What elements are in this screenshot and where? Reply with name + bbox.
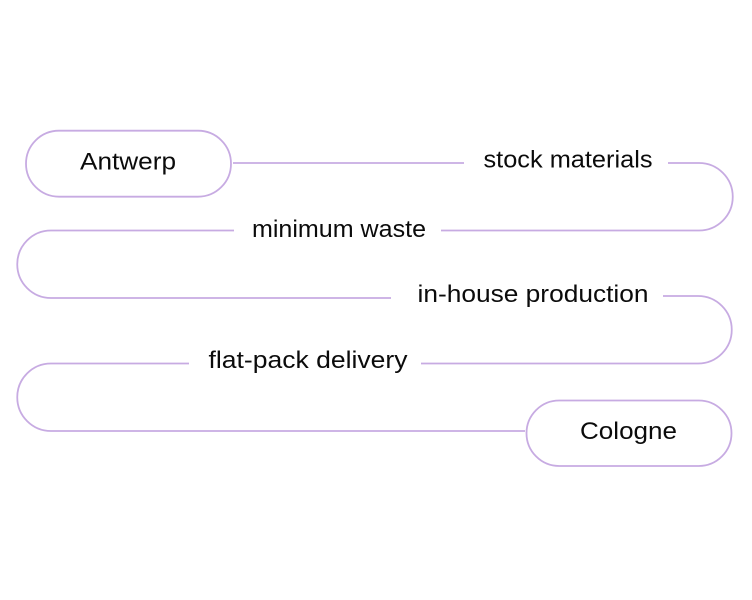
step label: stock materials: stock materials — [484, 146, 652, 174]
start node: Antwerp — [26, 131, 231, 197]
step label: in-house production: in-house production — [418, 281, 648, 308]
end node: Cologne — [526, 400, 732, 466]
step label: minimum waste: minimum waste — [252, 216, 426, 243]
end node: Cologne: Cologne — [580, 418, 677, 445]
start node: Antwerp: Antwerp — [80, 148, 176, 176]
route line — [17, 163, 733, 431]
step label: flat-pack delivery: flat-pack delivery — [208, 347, 408, 374]
